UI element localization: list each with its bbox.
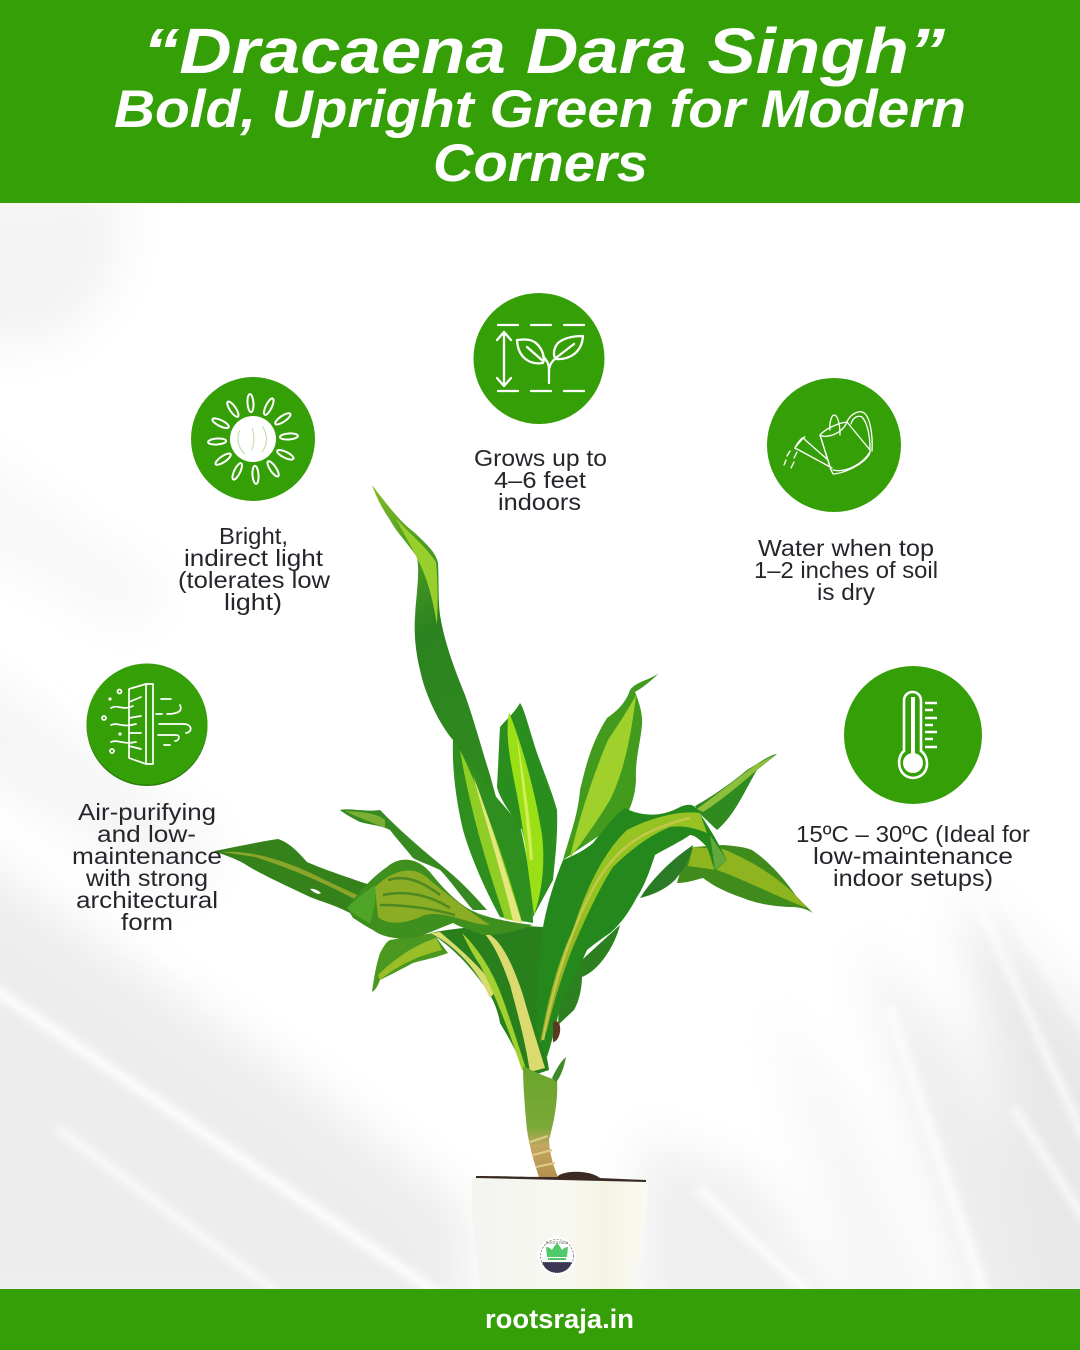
text: water: 1–2 inches of soil [754, 557, 938, 583]
text: light: indirect light [184, 545, 324, 571]
back thin right leaf [695, 754, 777, 830]
text: air purifying: Air-purifying [78, 799, 216, 825]
title line 1: “Dracaena Dara Singh” [143, 15, 945, 87]
tall leaf lower variegated [453, 740, 533, 923]
text: temperature: low-maintenance [813, 843, 1013, 869]
text: water: Water when top [758, 535, 934, 561]
text: air purifying: architectural [76, 887, 218, 913]
text: air purifying [72, 799, 222, 935]
header banner [0, 0, 1080, 203]
pot logo badge [538, 1237, 576, 1275]
title line 2: Bold, Upright Green for Modern [114, 80, 966, 139]
icon: air filter [86, 664, 208, 786]
text: temperature: 15ºC – 30ºC (Ideal for [796, 821, 1030, 847]
upper right leaf [563, 673, 659, 860]
icon: sun [191, 377, 315, 501]
icon: plant height [474, 293, 604, 424]
feature: height [474, 293, 607, 515]
tall leaf upper [372, 485, 505, 830]
text: air purifying: and low- [97, 821, 196, 847]
text: light: light) [224, 589, 282, 615]
center upright leaf [497, 703, 557, 917]
lower left small leaf [372, 933, 448, 992]
pot [472, 1172, 647, 1289]
stem [523, 1066, 558, 1177]
feature: water [754, 378, 938, 605]
text: height [474, 445, 607, 515]
big front right leaf [537, 805, 727, 1057]
central downward variegated leaf [430, 926, 549, 1078]
feature: light [178, 377, 331, 615]
title line 3: Corners [433, 134, 648, 193]
text: water [754, 535, 938, 605]
footer banner [0, 1289, 1080, 1350]
small lower-right dark leaves [558, 925, 620, 1025]
text: light: Bright, [219, 523, 288, 549]
text: temperature [796, 821, 1030, 891]
stem sheath and brown spot [552, 1057, 566, 1082]
text: temperature: indoor setups) [833, 865, 993, 891]
icon: watering can [767, 378, 901, 512]
feature: temperature [796, 666, 1030, 891]
text: height: indoors [498, 489, 581, 515]
leaves behind [214, 485, 813, 1177]
dark inner right leaf [640, 845, 693, 898]
plant in white pot [214, 485, 813, 1289]
text: height: Grows up to [474, 445, 607, 471]
thin upper left leaf [340, 809, 487, 910]
text: air purifying: maintenance [72, 843, 222, 869]
text: light: (tolerates low [178, 567, 331, 593]
feature: air purifying [72, 664, 222, 935]
pot logo badge: ROOTS RAJA [546, 1241, 569, 1245]
curled front-left leaf [347, 860, 533, 939]
text: height: 4–6 feet [494, 467, 587, 493]
icon: thermometer [844, 666, 982, 804]
text: air purifying: form [121, 909, 173, 935]
long left leaf [214, 839, 385, 913]
text: air purifying: with strong [85, 865, 208, 891]
text: water: is dry [817, 579, 875, 605]
far right variegated leaf [677, 845, 813, 913]
text: light [178, 523, 331, 615]
website url: rootsraja.in [485, 1304, 634, 1334]
